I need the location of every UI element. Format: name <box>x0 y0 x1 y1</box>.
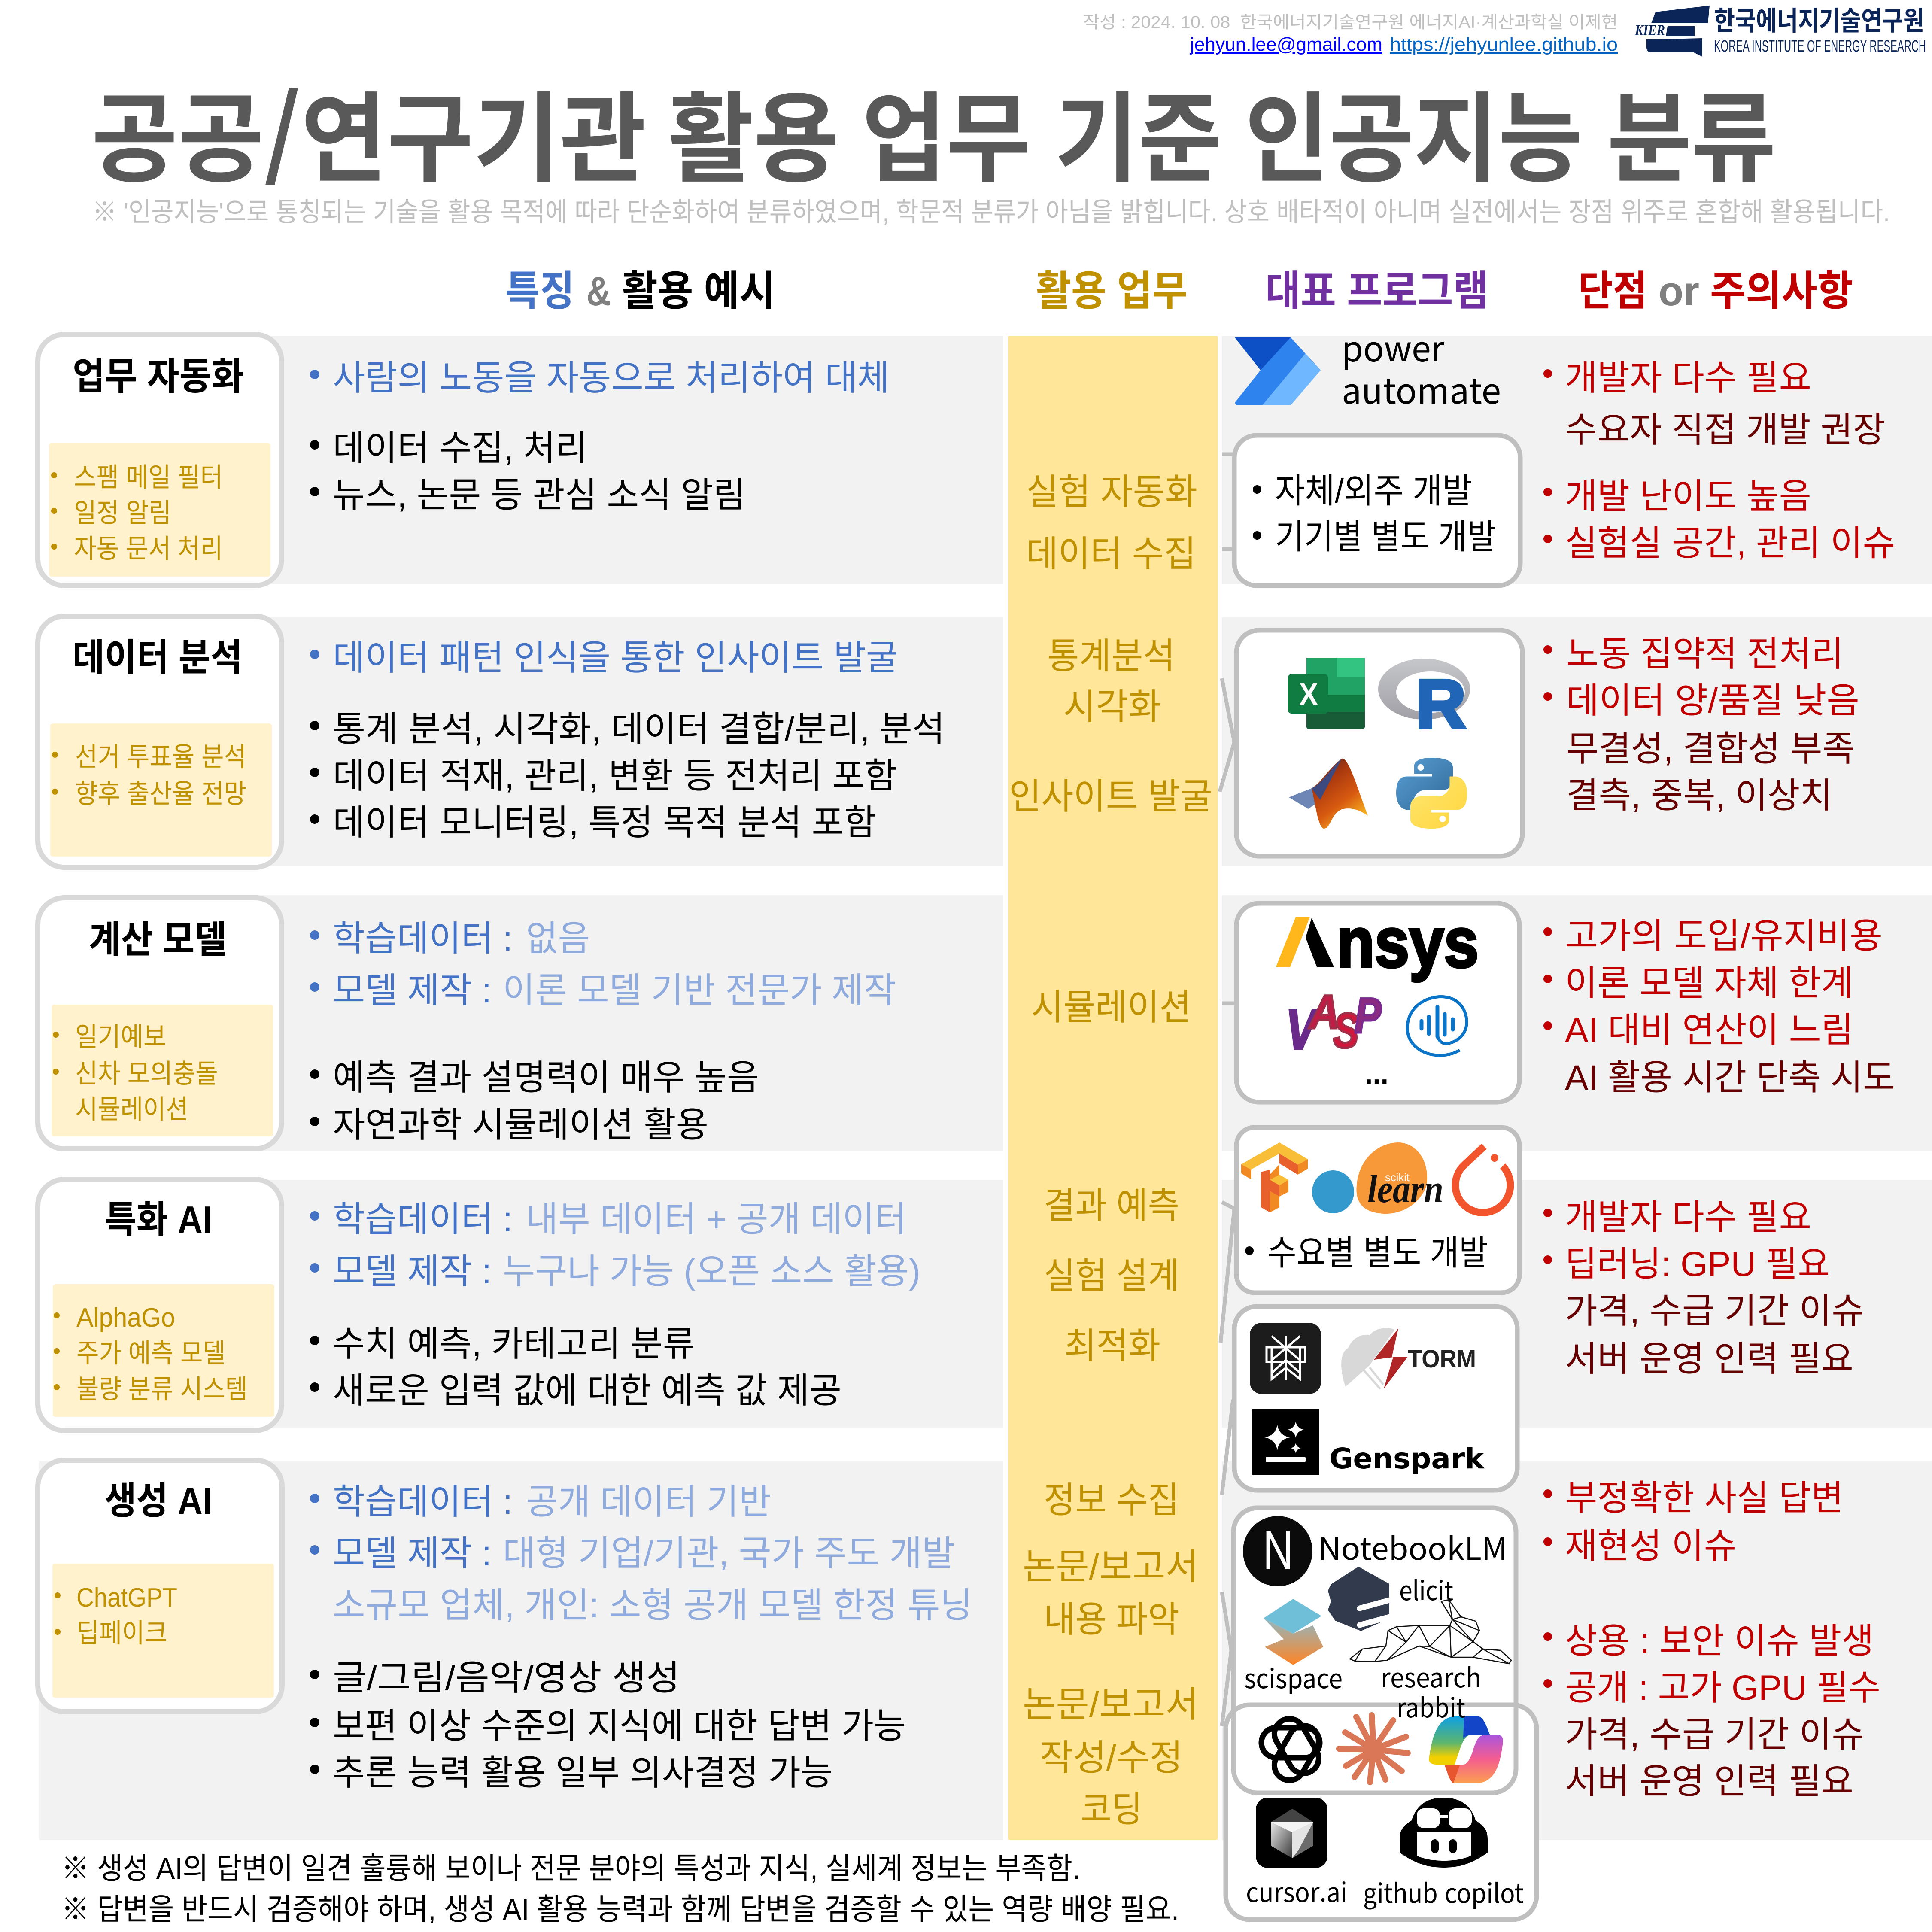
icon: cursor <box>1256 1798 1327 1868</box>
card title: 계산 모델 <box>89 918 227 961</box>
examples box <box>49 443 270 577</box>
title: 분류 <box>1607 60 1776 202</box>
category card <box>38 1460 282 1712</box>
card title: 생성 AI <box>105 1479 212 1522</box>
examples box: 향후 출산율 전망 <box>75 779 246 809</box>
header credit: https://jehyunlee.github.io <box>1390 34 1618 55</box>
features text <box>310 1200 920 1410</box>
column heading: weaknesses <box>1578 268 1853 314</box>
icon: excel <box>1288 658 1365 729</box>
program card: general AI and coding tools: github copilot <box>1363 1872 1524 1911</box>
title <box>91 60 1776 202</box>
examples box: 일정 알림 <box>74 498 171 528</box>
logo: vasp <box>1286 986 1381 1061</box>
features text: 학습데이터 : <box>333 1200 513 1239</box>
program card: ML frameworks: 수요별 별도 개발 <box>1267 1234 1488 1272</box>
features text <box>310 638 945 842</box>
examples box: 자동 문서 처리 <box>74 534 223 564</box>
panel: weaknesses automation: 개발자 다수 필요 <box>1565 358 1811 398</box>
column heading: features and examples: 활용 예시 <box>622 268 775 314</box>
program: power automate: automate <box>1342 363 1501 414</box>
features text: 자연과학 시뮬레이션 활용 <box>333 1106 708 1145</box>
program card: data analysis tools <box>1236 630 1522 856</box>
icon: excel: X <box>1299 677 1318 712</box>
panel: work use column <box>1008 336 1218 1840</box>
panel: weaknesses automation <box>1543 358 1895 563</box>
icon: matlab <box>1289 759 1368 829</box>
panel: weaknesses specialized AI: 가격, 수급 기간 이슈 <box>1565 1291 1864 1331</box>
program card: in-house development <box>1234 435 1520 586</box>
panel: weaknesses generative AI: 공개 : 고가 GPU 필수 <box>1565 1668 1880 1707</box>
panel: 계산 모델 <box>38 898 896 1149</box>
title: 기준 <box>1055 60 1221 202</box>
connectors from work use to programs <box>1220 454 1235 1726</box>
work use labels <box>1009 472 1212 1829</box>
panel: weaknesses specialized AI <box>1543 1198 1864 1379</box>
features text: 공개 데이터 기반 <box>526 1482 771 1522</box>
title: 활용 <box>668 60 839 202</box>
features text: 데이터 패턴 인식을 통한 인사이트 발굴 <box>333 638 898 677</box>
card title: 특화 AI <box>105 1198 212 1241</box>
title: 업무 <box>862 60 1031 202</box>
panel: weaknesses computational model: 이론 모델 자체 한계 <box>1565 964 1853 1003</box>
features text: 데이터 모니터링, 특정 목적 분석 포함 <box>333 803 876 842</box>
header credit <box>1083 13 1618 55</box>
features text: 누구나 가능 (오픈 소스 활용) <box>503 1252 920 1291</box>
panel: weaknesses generative AI <box>1543 1479 1880 1801</box>
icon: perplexity <box>1250 1323 1321 1394</box>
program card: document tools <box>1233 1508 1516 1793</box>
work use labels: 논문/보고서 <box>1023 1684 1199 1725</box>
panel: weaknesses generative AI: 재현성 이슈 <box>1565 1527 1736 1566</box>
logo: vasp: P <box>1355 988 1381 1043</box>
features text: 뉴스, 논문 등 관심 소식 알림 <box>333 476 745 515</box>
examples box: AlphaGo <box>76 1303 175 1333</box>
program card: in-house development: 자체/외주 개발 <box>1275 472 1472 510</box>
panel: weaknesses computational model: AI 대비 연산이 느림 <box>1565 1011 1853 1050</box>
footnotes <box>61 1852 1179 1926</box>
column heading: features and examples: & <box>586 268 611 314</box>
card title: 업무 자동화 <box>73 355 244 398</box>
features text: 새로운 입력 값에 대한 예측 값 제공 <box>333 1371 841 1410</box>
program: power automate <box>1235 321 1501 414</box>
icon: scikit-learn: learn <box>1367 1167 1443 1211</box>
column heading: weaknesses: 단점 <box>1578 268 1647 314</box>
examples box: 선거 투표율 분석 <box>75 742 246 772</box>
panel: 생성 AI <box>38 1460 972 1792</box>
document tools overlay <box>1233 1508 1516 1793</box>
column heading: programs: 대표 프로그램 <box>1265 268 1488 314</box>
footnotes: ※ 생성 AI의 답변이 일견 훌륭해 보이나 전문 분야의 특성과 지식, 실세계 정보는 부족함. <box>61 1852 1080 1885</box>
work use labels: 작성/수정 <box>1040 1738 1183 1778</box>
features text: 소규모 업체, 개인: 소형 공개 모델 한정 튜닝 <box>333 1586 972 1625</box>
column heading: weaknesses: or <box>1659 268 1699 314</box>
document tools overlay: elicit <box>1399 1569 1453 1608</box>
panel: weaknesses automation: 개발 난이도 높음 <box>1565 477 1811 516</box>
logo: KIER <box>1634 6 1926 57</box>
program card: general AI and coding tools <box>1226 1705 1537 1920</box>
icon: scikit-learn <box>1312 1142 1443 1214</box>
category card <box>38 898 282 1149</box>
panel: weaknesses automation: 수요자 직접 개발 권장 <box>1565 410 1885 450</box>
work use labels: 결과 예측 <box>1044 1185 1179 1226</box>
panel: weaknesses computational model <box>1543 917 1895 1097</box>
panel: weaknesses specialized AI: 개발자 다수 필요 <box>1565 1198 1811 1237</box>
program: power automate: power <box>1342 321 1444 372</box>
icon: python <box>1396 758 1467 829</box>
logo: vasp: V <box>1286 998 1319 1061</box>
examples box: 시뮬레이션 <box>75 1095 188 1124</box>
icon: pytorch <box>1455 1146 1510 1212</box>
examples box: 스팸 메일 필터 <box>74 463 223 492</box>
panel: weaknesses data analysis: 노동 집약적 전처리 <box>1566 635 1844 674</box>
panel: weaknesses generative AI: 가격, 수급 기간 이슈 <box>1565 1715 1864 1754</box>
features text <box>310 919 896 1145</box>
features text: 학습데이터 : <box>333 919 513 958</box>
features text <box>310 358 890 515</box>
work use labels: 인사이트 발굴 <box>1009 776 1212 817</box>
work use labels: 코딩 <box>1081 1789 1142 1829</box>
work use labels: 논문/보고서 <box>1023 1546 1199 1587</box>
features text: 데이터 수집, 처리 <box>333 429 588 468</box>
features text: 예측 결과 설명력이 매우 높음 <box>333 1058 759 1097</box>
icon: notebooklm <box>1243 1510 1312 1586</box>
footnotes: ※ 답변을 반드시 검증해야 하며, 생성 AI 활용 능력과 함께 답변을 검증할 수 있는 역량 배양 필요. <box>61 1893 1179 1926</box>
examples box: ChatGPT <box>76 1583 177 1613</box>
icon: openai <box>1261 1713 1324 1786</box>
work use labels: 시각화 <box>1063 687 1161 727</box>
features text: 데이터 적재, 관리, 변환 등 전처리 포함 <box>333 756 897 796</box>
panel: weaknesses generative AI: 서버 운영 인력 필요 <box>1565 1762 1853 1801</box>
examples box: 주가 예측 모델 <box>76 1339 225 1368</box>
features text: 내부 데이터 + 공개 데이터 <box>526 1200 907 1239</box>
examples box: 신차 모의충돌 <box>75 1059 218 1089</box>
work use labels: 최적화 <box>1064 1326 1160 1366</box>
icon: elicit <box>1328 1567 1391 1631</box>
work use labels: 시뮬레이션 <box>1031 987 1191 1027</box>
icon: R: R <box>1416 665 1466 742</box>
header credit: 작성 : 2024. 10. 08 한국에너지기술연구원 에너지AI·계산과학실 이제현 <box>1083 13 1618 32</box>
features text: 수치 예측, 카테고리 분류 <box>333 1324 695 1364</box>
panel: weaknesses data analysis <box>1543 635 1859 815</box>
panel: 특화 AI <box>38 1179 920 1431</box>
features text: 통계 분석, 시각화, 데이터 결합/분리, 분석 <box>333 710 945 749</box>
features text: 글/그림/음악/영상 생성 <box>333 1659 680 1698</box>
features text <box>310 1482 972 1792</box>
examples box: 일기예보 <box>75 1022 166 1052</box>
panel: weaknesses automation: 실험실 공간, 관리 이슈 <box>1565 524 1895 563</box>
icon: research rabbit <box>1350 1600 1511 1664</box>
icon: R <box>1378 659 1470 742</box>
panel: weaknesses generative AI: 부정확한 사실 답변 <box>1565 1479 1844 1518</box>
program card: ML frameworks <box>1236 1127 1519 1293</box>
card title: 데이터 분석 <box>73 636 243 679</box>
column heading: features and examples <box>505 268 775 314</box>
logo: vasp: S <box>1333 1003 1359 1058</box>
column heading: features and examples: 특징 <box>505 268 574 314</box>
examples box: 딥페이크 <box>76 1619 167 1648</box>
panel: weaknesses computational model: AI 활용 시간 단축 시도 <box>1565 1058 1895 1097</box>
icon: genspark <box>1252 1409 1319 1475</box>
program card: research tools <box>1234 1306 1517 1490</box>
features text: 보편 이상 수준의 지식에 대한 답변 가능 <box>333 1707 906 1746</box>
features text: 모델 제작 : <box>333 971 492 1010</box>
icon: github copilot <box>1400 1798 1488 1868</box>
logo: ansys <box>1276 903 1479 982</box>
features text: 사람의 노동을 자동으로 처리하여 대체 <box>333 358 890 398</box>
features text: 학습데이터 : <box>333 1482 513 1522</box>
panel: weaknesses specialized AI: 딥러닝: GPU 필요 <box>1565 1245 1830 1284</box>
column heading: work use: 활용 업무 <box>1036 268 1188 314</box>
logo: storm: TORM <box>1408 1345 1476 1373</box>
icon: tensorflow <box>1241 1142 1308 1212</box>
program card: simulation tools <box>1236 903 1519 1102</box>
header credit: jehyun.lee@gmail.com <box>1189 34 1382 55</box>
row background bands <box>39 336 1932 1840</box>
icon: notebooklm: N <box>1262 1510 1294 1584</box>
work use labels: 실험 자동화 <box>1026 472 1197 512</box>
work use labels: 데이터 수집 <box>1026 534 1196 574</box>
panel: weaknesses data analysis: 무결성, 결합성 부족 <box>1566 729 1855 769</box>
icon: microsoft copilot <box>1429 1716 1503 1783</box>
program card: research tools: Genspark <box>1329 1442 1485 1475</box>
column heading: weaknesses: 주의사항 <box>1710 268 1853 314</box>
icon: scispace <box>1264 1599 1323 1665</box>
examples box <box>53 1284 274 1417</box>
document tools overlay: scispace <box>1244 1657 1343 1696</box>
yellow column background <box>1008 336 1218 1840</box>
examples box <box>52 1005 273 1136</box>
logo: ansys: nsys <box>1337 903 1479 982</box>
features text: 추론 능력 활용 일부 의사결정 가능 <box>333 1753 833 1792</box>
title: 인공지능 <box>1245 60 1583 202</box>
panel: weaknesses data analysis: 결측, 중복, 이상치 <box>1566 776 1832 815</box>
work use labels: 정보 수집 <box>1044 1480 1179 1520</box>
logo: blue ring with wave bars <box>1407 997 1467 1055</box>
work use labels: 내용 파악 <box>1044 1599 1179 1640</box>
logo: vasp: A <box>1308 986 1340 1039</box>
logo: KIER: KIER <box>1634 21 1665 39</box>
features text: 대형 기업/기관, 국가 주도 개발 <box>503 1534 955 1573</box>
work use labels: 실험 설계 <box>1044 1256 1179 1296</box>
examples box <box>50 723 272 857</box>
features text: 이론 모델 기반 전문가 제작 <box>503 971 896 1010</box>
icon: claude <box>1339 1715 1408 1782</box>
panel: weaknesses computational model: 고가의 도입/유지비용 <box>1565 917 1883 956</box>
features text: 없음 <box>526 919 590 958</box>
features text: 모델 제작 : <box>333 1534 492 1573</box>
document tools overlay: NotebookLM <box>1318 1524 1507 1569</box>
category card <box>38 616 282 867</box>
category card <box>38 1179 282 1431</box>
examples box: 불량 분류 시스템 <box>76 1375 248 1404</box>
category card <box>38 334 282 586</box>
panel: weaknesses generative AI: 상용 : 보안 이슈 발생 <box>1565 1622 1874 1661</box>
title: 공공/연구기관 <box>91 60 646 202</box>
features text: 모델 제작 : <box>333 1252 492 1291</box>
logo: storm <box>1341 1328 1476 1389</box>
document tools overlay: research <box>1381 1656 1481 1695</box>
program card: in-house development: 기기별 별도 개발 <box>1275 518 1496 556</box>
icon: power automate <box>1235 337 1321 405</box>
work use labels: 통계분석 <box>1047 636 1175 676</box>
program card: general AI and coding tools: cursor.ai <box>1246 1871 1347 1910</box>
document tools overlay: rabbit <box>1397 1686 1465 1725</box>
panel: weaknesses data analysis: 데이터 양/품질 낮음 <box>1566 681 1859 720</box>
examples box <box>52 1564 274 1698</box>
panel: weaknesses specialized AI: 서버 운영 인력 필요 <box>1565 1340 1853 1379</box>
icon: scikit-learn: scikit <box>1385 1171 1410 1184</box>
ellipsis: ... <box>1365 1058 1388 1090</box>
panel: 업무 자동화 <box>38 334 890 586</box>
panel: 데이터 분석 <box>38 616 945 867</box>
